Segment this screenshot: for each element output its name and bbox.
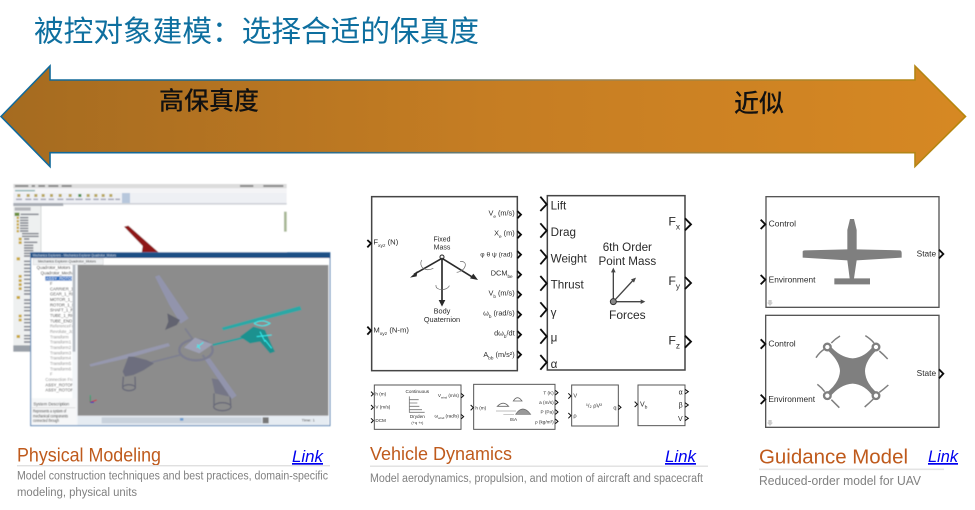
6DOF fixed mass block: bb [488, 355, 494, 360]
6DOF fixed mass block: (m/s²) [493, 350, 515, 359]
fixed-wing guidance block: Environment [769, 274, 816, 284]
system description box: Represents a system of [33, 408, 67, 413]
axes icon [410, 255, 478, 307]
6th order point mass block: z [676, 340, 680, 350]
6th order point mass block: α [551, 358, 558, 371]
incidence and airspeed block: α [679, 389, 683, 396]
double-headed fidelity arrow [1, 66, 966, 166]
model tree: Quadrotor_Mechanics [41, 270, 82, 275]
6th order point mass block: γ [551, 307, 557, 320]
6DOF fixed mass block: A [483, 350, 488, 359]
caption: physical modeling: modeling, physical units [17, 487, 137, 499]
6DOF fixed mass block: (m) [502, 229, 515, 238]
incidence and airspeed block [635, 385, 688, 426]
model tree: CARRIER_1_RIGID [50, 286, 87, 291]
6th order point mass block: Point Mass [599, 255, 656, 268]
6DOF fixed mass block: Body [434, 306, 451, 315]
fixed-wing guidance block [761, 197, 943, 307]
3D viewport with quadrotor [78, 265, 328, 416]
Dryden wind block: wind [438, 416, 445, 420]
incidence and airspeed block: V [678, 416, 683, 423]
6DOF fixed mass block: (m/s) [496, 289, 515, 298]
panel: vehicle dynamics block diagrams [367, 196, 691, 429]
model tree: Quadrotor_Motors [37, 265, 70, 270]
caption: guidance model: Guidance Model [759, 446, 908, 468]
model tree: Transform1 [50, 340, 72, 345]
6DOF fixed mass block: (m/s) [496, 209, 515, 218]
6th order point mass block [540, 196, 691, 371]
model tree: Transform2 [50, 345, 72, 350]
Dryden wind block [371, 385, 464, 429]
model tree: Transform5 [50, 361, 72, 366]
Dryden wind block: DCM [375, 418, 386, 423]
arrow label: approximate: 近似 [734, 90, 784, 118]
model tree: Revolute_Joint [50, 329, 78, 334]
6DOF fixed mass block: /dt [507, 329, 515, 338]
model tree: MOTOR_1_RIGID [50, 297, 84, 302]
panel: physical modeling screenshots [13, 184, 330, 426]
caption: physical modeling [17, 446, 330, 499]
6DOF fixed mass block: xyz [380, 331, 388, 337]
6th order point mass block: y [676, 281, 681, 291]
dynamic pressure block [568, 385, 621, 426]
model tree: ReferenceFrame [50, 324, 82, 329]
Dryden wind block: V [438, 393, 441, 398]
model tree: Transform6 [50, 366, 72, 371]
quadrotor guidance block: State [917, 368, 936, 378]
caption: vehicle dynamics [370, 443, 708, 485]
Dryden wind block: (m/s) [447, 393, 459, 398]
model tree: F [50, 372, 53, 377]
force axes icon [610, 268, 645, 305]
6th order point mass block: Weight [551, 252, 587, 265]
6DOF fixed mass block: Quaternion [424, 315, 460, 324]
dynamic pressure block: ¹/₂ ρV² [586, 404, 602, 410]
6DOF fixed mass block: e [499, 234, 502, 239]
front Mechanics Explorer window [31, 253, 330, 426]
model tree: ASSY_ROTOR_ONE [46, 276, 86, 281]
6DOF fixed mass block: b [493, 294, 496, 299]
link: Link [292, 447, 324, 466]
ISA atmosphere block: P (Pa) [541, 410, 554, 415]
icon: quadrotor [816, 336, 888, 408]
6DOF fixed mass block: V [488, 289, 493, 298]
6th order point mass block: F [668, 215, 676, 229]
ISA atmosphere block: a (m/s) [539, 400, 554, 405]
caption: guidance model [759, 446, 959, 488]
model tree [32, 265, 73, 398]
6DOF fixed mass block: Mass [434, 245, 451, 252]
6DOF fixed mass block: (N) [386, 237, 399, 246]
front Mechanics Explorer window: Mechanics Explorers - Mechanics Explorer Quadrotor_Motors [33, 254, 116, 258]
6th order point mass block: Drag [551, 226, 576, 239]
description: Model construction techniques and best practices, domain-specific [17, 470, 328, 482]
system description box: mechanical components [33, 413, 68, 418]
Dryden wind block: h (m) [375, 392, 387, 397]
panel: guidance model blocks [761, 197, 943, 427]
model tree: TUBE_END_1_RIGID [50, 318, 91, 323]
6DOF fixed mass block [367, 197, 521, 371]
model tree: GEAR_1_RIGID [50, 292, 80, 297]
description: Reduced-order model for UAV [759, 474, 922, 488]
fixed-wing guidance block: State [917, 248, 936, 258]
6DOF fixed mass block: M [373, 325, 380, 334]
quadrotor guidance block: Environment [768, 394, 816, 404]
caption: physical modeling: Physical Modeling [17, 446, 161, 466]
6th order point mass block: Forces [609, 308, 646, 322]
6th order point mass block: Thrust [551, 278, 584, 291]
6DOF fixed mass block: φ θ ψ (rad) [480, 252, 513, 259]
6DOF fixed mass block: ω [483, 309, 489, 318]
6th order point mass block: F [668, 333, 676, 347]
Dryden wind block: (+q +r) [411, 420, 424, 425]
incidence and airspeed block: V [640, 402, 645, 409]
incidence and airspeed block: β [679, 403, 683, 410]
6DOF fixed mass block: Fixed [433, 237, 451, 244]
ISA atmosphere block: T (K) [543, 390, 554, 395]
model tree: Transform [50, 334, 69, 339]
6DOF fixed mass block: xyz [378, 243, 386, 249]
back CAD window [13, 184, 287, 352]
Dryden wind block: V (m/s) [375, 405, 391, 410]
icon: fixed-wing aircraft [803, 219, 902, 284]
link: Link [928, 447, 959, 466]
model tree: ROTOR_1_RIGID [50, 302, 83, 307]
fixed-wing guidance block: Control [769, 219, 796, 229]
6DOF fixed mass block: b [504, 334, 507, 339]
model tree: TUBE_1_RIGID [50, 313, 80, 318]
quadrotor guidance block [761, 315, 943, 427]
playback bar [78, 416, 328, 425]
6th order point mass block: 6th Order [603, 241, 652, 254]
dynamic pressure block: ρ [573, 414, 577, 420]
6DOF fixed mass block: b [489, 314, 492, 319]
dynamic pressure block: q [613, 405, 616, 411]
6DOF fixed mass block: (rad/s) [491, 309, 515, 318]
description: Model aerodynamics, propulsion, and motion of aircraft and spacecraft [370, 473, 704, 485]
6DOF fixed mass block: V [488, 209, 493, 218]
ISA atmosphere block: ρ (kg/m³) [535, 420, 554, 425]
Dryden wind block: (rad/s) [444, 414, 459, 419]
6th order point mass block: μ [551, 332, 557, 345]
quadrotor guidance block: Control [768, 338, 796, 348]
model tree: F [50, 281, 53, 286]
ISA atmosphere block: ISA [510, 417, 518, 422]
model tree: ASSY_ROTOR_ONE [45, 388, 85, 393]
model tree: SHAFT_1_RIGID [50, 308, 82, 313]
6DOF fixed mass block: e [493, 214, 496, 219]
system description box [32, 399, 76, 425]
Dryden wind block: Continuous [406, 389, 430, 394]
title: 被控对象建模：选择合适的保真度 [34, 16, 479, 48]
dynamic pressure block: V [573, 394, 577, 400]
6DOF fixed mass block: X [494, 229, 499, 238]
front Mechanics Explorer window: Mechanics Explorer-Quadrotor_Motors [38, 259, 96, 264]
model tree: ASSY_ROTOR_ONE [45, 382, 85, 387]
Dryden wind block: wind [441, 395, 447, 399]
6th order point mass block: F [668, 274, 676, 288]
system description box: System Description [33, 402, 70, 407]
link: Link [665, 447, 697, 466]
red wing part [124, 226, 159, 253]
Dryden wind block: ω [434, 414, 438, 419]
model tree: Transform3 [50, 350, 72, 355]
ISA atmosphere block [471, 384, 558, 429]
6DOF fixed mass block: F [373, 237, 378, 246]
model tree: Connection Frames [45, 377, 82, 382]
system description box: connected through [33, 418, 60, 423]
ISA atmosphere block: h (m) [475, 406, 487, 411]
playback bar: Time: 1 [302, 418, 316, 423]
clouds [497, 398, 522, 406]
6DOF fixed mass block: DCM [491, 269, 507, 278]
6th order point mass block: x [676, 222, 681, 232]
6DOF fixed mass block: dω [494, 329, 504, 338]
incidence and airspeed block: b [645, 405, 648, 411]
6DOF fixed mass block: be [507, 274, 513, 279]
caption: vehicle dynamics: Vehicle Dynamics [370, 443, 512, 464]
model tree: Transform4 [50, 356, 72, 361]
6th order point mass block: Lift [551, 199, 567, 212]
arrow label: high fidelity: 高保真度 [159, 88, 259, 116]
6DOF fixed mass block: (N-m) [387, 325, 409, 334]
Dryden wind block: Dryden [410, 414, 425, 419]
